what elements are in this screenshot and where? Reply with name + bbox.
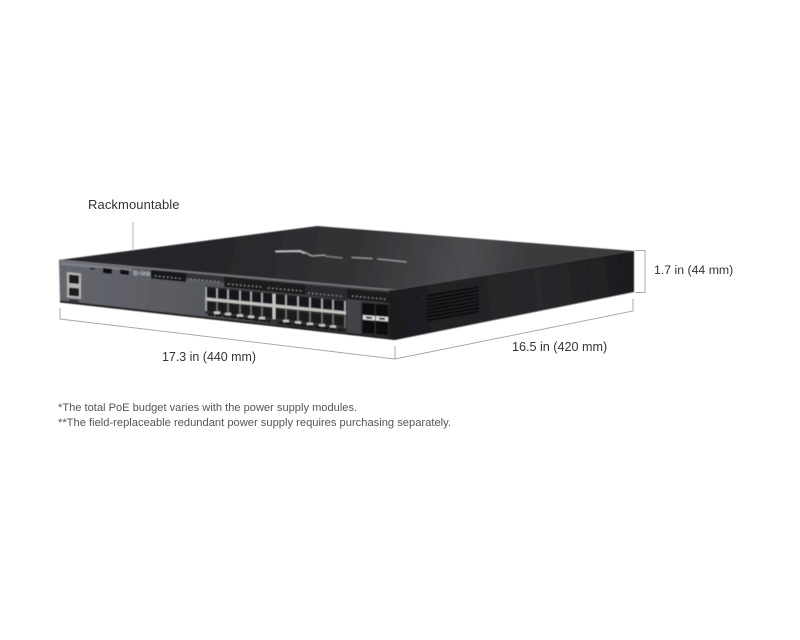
side screw holes (407, 260, 621, 327)
upper port dividers (206, 287, 345, 312)
port block background (205, 286, 347, 334)
front right dark column (389, 290, 395, 340)
depth dimension bracket (395, 299, 633, 359)
4 SFP slots (361, 302, 389, 338)
front top edge (59, 260, 395, 291)
rackmount leader line (132, 222, 134, 249)
dark vent band with port LEDs (151, 270, 389, 303)
front bottom edge (60, 300, 395, 340)
width dimension bracket (60, 308, 395, 359)
label: depth: 16.5 in (420 mm) (512, 340, 607, 354)
label: height: 1.7 in (44 mm) (654, 263, 733, 277)
logo on top face (276, 251, 406, 262)
bottom row of ports (208, 302, 344, 326)
USB ports (90, 268, 129, 275)
label: width: 17.3 in (440 mm) (162, 350, 256, 364)
top row of ports (208, 288, 344, 310)
side face of switch (395, 251, 634, 340)
console and management ports (67, 272, 81, 302)
label: Rackmountable: Rackmountable (88, 197, 180, 212)
management panel strip (61, 262, 132, 271)
top face of switch (59, 226, 634, 290)
side ventilation slots (427, 286, 479, 322)
light bar between port rows (206, 298, 346, 314)
centre divider between port groups (272, 294, 276, 319)
front brand label: tp-link (133, 270, 151, 278)
footnote: PoE budget: *The total PoE budget varies with the power supply modules. (58, 402, 357, 414)
24 RJ45 ports (205, 286, 347, 334)
lower port dividers (217, 299, 345, 328)
height dimension bracket (635, 250, 645, 292)
footnote: power supply: **The field-replaceable redundant power supply requires purchasing separately. (58, 417, 451, 429)
dark labels under ports (208, 314, 346, 330)
front panel (59, 260, 395, 340)
light port latches (214, 312, 336, 328)
